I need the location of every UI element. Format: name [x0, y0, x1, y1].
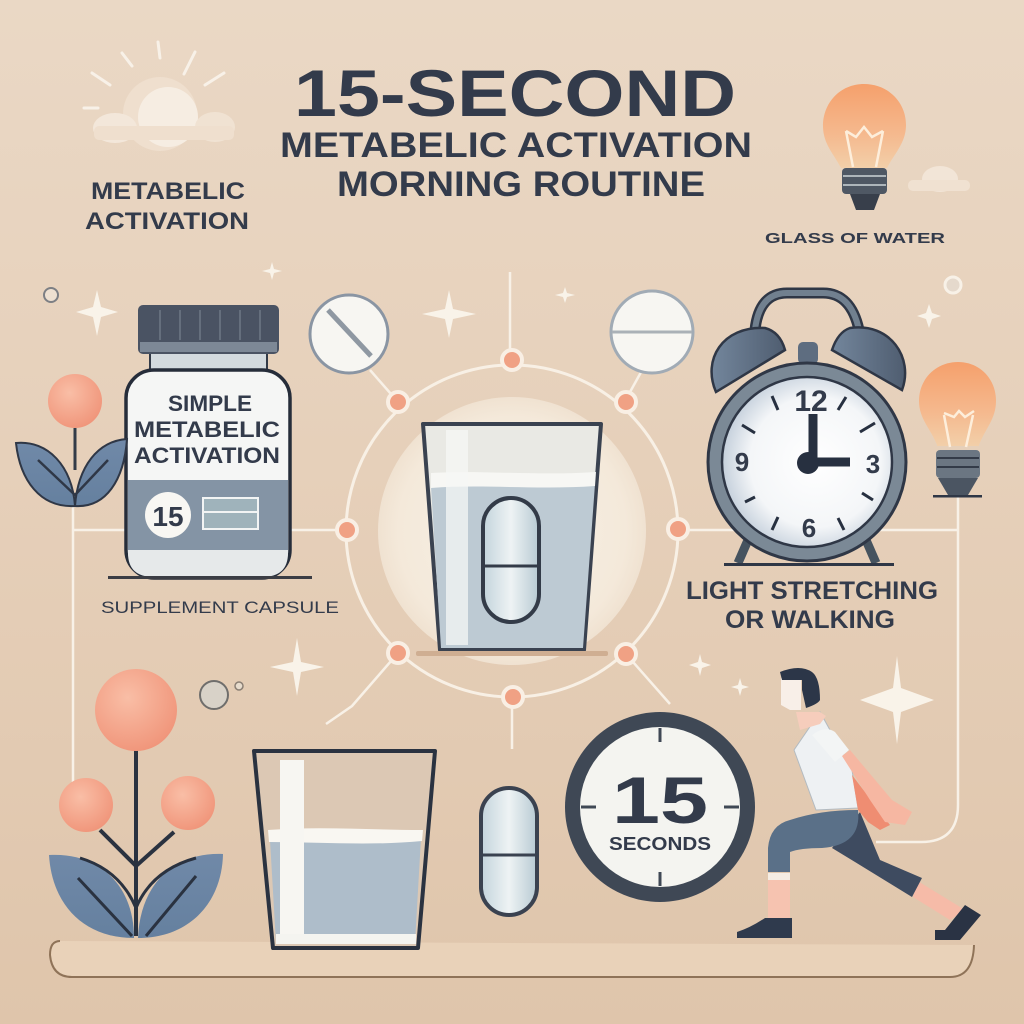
icon: tablets — [310, 291, 693, 373]
label: metabolic activation: ACTIVATION — [85, 208, 249, 235]
icon: alarm clock: 6 — [802, 513, 816, 543]
label: light stretching or walking: LIGHT STRETCHING — [686, 577, 938, 605]
icon: 15 seconds timer — [565, 712, 755, 902]
ring nodes — [337, 350, 688, 707]
icon: stretching person — [737, 668, 981, 940]
label: glass of water: GLASS OF WATER — [765, 230, 945, 247]
decorative sparkles — [44, 262, 961, 744]
icon: alarm clock: 3 — [866, 449, 880, 479]
floor platform — [50, 941, 974, 977]
icon: alarm clock: 9 — [735, 447, 749, 477]
title: MORNING ROUTINE — [337, 165, 705, 204]
central capsule — [483, 498, 539, 622]
label: metabolic activation — [85, 178, 249, 235]
icon: alarm clock — [708, 293, 906, 566]
icon: 15 seconds timer: SECONDS — [609, 834, 711, 854]
icon: alarm clock: 12 — [794, 385, 828, 418]
icon: capsule — [481, 788, 537, 915]
bottle label text: SIMPLE — [168, 391, 252, 416]
icon: large plant — [49, 669, 223, 938]
panel: supplement bottle: 15 — [152, 501, 184, 532]
label: light stretching or walking — [686, 577, 938, 634]
bottle badge — [145, 492, 191, 538]
title: 15-SECOND — [294, 56, 736, 130]
panel: central glass with ring — [337, 350, 688, 707]
icon: left plant — [16, 374, 127, 506]
icon: light bulb top right — [823, 84, 970, 210]
icon: light bulb right — [919, 362, 996, 498]
title: METABELIC ACTIVATION — [280, 126, 752, 165]
label: supplement capsule: SUPPLEMENT CAPSULE — [101, 598, 339, 617]
title — [280, 56, 752, 204]
icon: large glass of water — [254, 751, 435, 948]
bottle label text: ACTIVATION — [134, 443, 280, 468]
label: metabolic activation: METABELIC — [91, 178, 245, 205]
icon: 15 seconds timer: 15 — [612, 763, 708, 837]
label: light stretching or walking: OR WALKING — [725, 606, 895, 634]
panel: supplement bottle — [108, 305, 312, 579]
connector lines — [73, 272, 958, 842]
icon: sun behind clouds — [84, 42, 235, 151]
bottle label text — [134, 391, 280, 468]
central glass — [423, 424, 601, 650]
bottle label text: METABELIC — [134, 417, 280, 442]
